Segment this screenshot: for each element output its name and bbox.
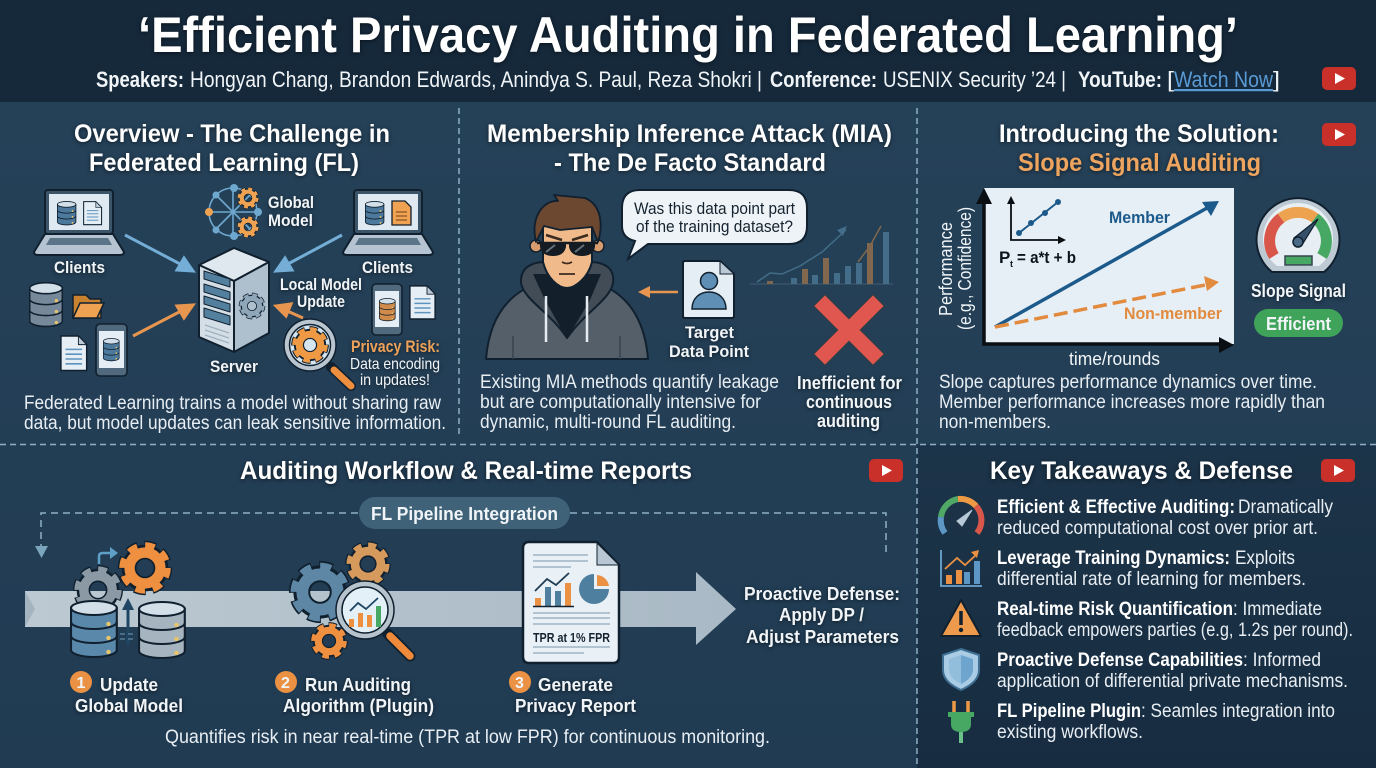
label: privacy risk <box>350 337 440 389</box>
item 1: Efficient & Effective Auditing: <box>997 497 1235 518</box>
icon: left document <box>61 336 87 371</box>
text: MIA body <box>480 372 779 433</box>
panel background: key takeaways <box>917 445 1376 768</box>
label: proactive defense <box>744 583 900 647</box>
label: inefficient: continuous <box>806 391 892 412</box>
heading: solution: Slope Signal Auditing <box>1018 149 1261 177</box>
panel: slope signal solution <box>936 120 1356 433</box>
text: MIA body: but are computationally intensive for <box>480 392 762 413</box>
speech bubble: of the training dataset? <box>636 218 793 236</box>
icon: global model <box>205 184 262 240</box>
axis label: performance: (e.g., Confidence) <box>955 207 975 330</box>
speakers line <box>96 67 1280 92</box>
icon: gauge <box>1257 198 1340 272</box>
label: member: Member <box>1109 208 1170 227</box>
icon: right document <box>410 286 435 319</box>
icon: run auditing <box>295 546 410 656</box>
line: non-member <box>995 276 1219 327</box>
item 4 <box>997 650 1348 692</box>
label: clients left: Clients <box>54 258 105 277</box>
label: slope signal: Slope Signal <box>1251 280 1346 301</box>
icon: magnifier with gear <box>284 319 351 386</box>
item 4: application of differential private mechanisms. <box>997 671 1348 692</box>
formula: = a*t + b <box>1017 248 1076 267</box>
speakers line: Hongyan Chang, Brandon Edwards, Anindya S. Paul, Reza Shokri | <box>190 67 762 92</box>
icon: warning triangle <box>941 600 981 636</box>
label: inefficient: auditing <box>817 410 880 431</box>
panel: overview <box>24 120 446 434</box>
icon: plug <box>948 701 974 743</box>
heading: solution <box>999 120 1279 177</box>
axis label: performance <box>936 207 975 330</box>
label: global model: Global <box>268 194 314 212</box>
icon: left database <box>30 283 62 326</box>
formula: t <box>1010 259 1013 269</box>
icon: left laptop <box>34 190 124 255</box>
text: overview body: data, but model updates can leak sensitive information. <box>24 413 446 434</box>
label: privacy risk: in updates! <box>360 372 430 389</box>
item 4: Proactive Defense Capabilities <box>997 650 1243 671</box>
icon: shield <box>943 649 979 690</box>
item 5: existing workflows. <box>997 722 1143 743</box>
item 3: Real-time Risk Quantification <box>997 599 1233 620</box>
icon: privacy report <box>523 542 619 663</box>
item 3 <box>997 599 1353 641</box>
icon: mini chart <box>941 550 982 586</box>
axis label: time: time/rounds <box>1069 349 1160 369</box>
icon: target data point <box>683 261 734 318</box>
speakers line: YouTube: <box>1078 67 1162 92</box>
text: MIA body: dynamic, multi-round FL auditing. <box>480 412 736 433</box>
text: workflow caption: Quantifies risk in near real-time (TPR at low FPR) for continuous monitoring. <box>165 727 770 748</box>
item 2 <box>997 548 1306 590</box>
item 1: Dramatically <box>1238 497 1333 518</box>
label: privacy risk: Data encoding <box>350 356 440 373</box>
label: target data point <box>669 323 749 361</box>
label: step 1 <box>70 671 183 716</box>
heading: overview: Federated Learning (FL) <box>89 149 359 177</box>
icon: update global model <box>71 546 185 658</box>
label: step 1: Global Model <box>75 695 183 716</box>
label: proactive defense: Apply DP / <box>779 604 864 625</box>
label: step 2 <box>275 671 434 716</box>
heading: workflow: Auditing Workflow & Real-time Reports <box>240 457 692 485</box>
text: overview body: Federated Learning trains a model without sharing raw <box>24 393 441 414</box>
arrow: workflow <box>25 572 736 645</box>
heading: takeaways: Key Takeaways & Defense <box>990 457 1293 485</box>
icon: red cross <box>825 306 873 354</box>
heading: overview: Overview - The Challenge in <box>74 120 390 148</box>
icon: right phone <box>372 284 402 335</box>
label: step 3: Generate <box>538 674 613 695</box>
badge: efficient <box>1254 309 1343 337</box>
text: solution body: Member performance increases more rapidly than <box>939 392 1325 413</box>
title: ‘Efficient Privacy Auditing in Federated Learning’ <box>138 7 1238 63</box>
icon: hooded attacker <box>486 195 648 359</box>
label: proactive defense: Adjust Parameters <box>746 626 899 647</box>
item 2: Exploits <box>1235 548 1295 569</box>
label: step 2: Run Auditing <box>305 674 411 695</box>
item 5: FL Pipeline Plugin <box>997 701 1141 722</box>
icon: youtube takeaways <box>1321 459 1355 482</box>
text: solution body: non-members. <box>939 412 1051 433</box>
item 5 <box>997 701 1335 743</box>
panel: key takeaways <box>941 457 1355 743</box>
icon: folder <box>73 295 104 318</box>
label: non-member: Non-member <box>1124 304 1222 323</box>
speakers line: [ <box>1167 67 1174 92</box>
label: clients right: Clients <box>362 258 413 277</box>
label: global model <box>268 194 314 230</box>
item 2: differential rate of learning for members. <box>997 569 1306 590</box>
label: step 3 <box>509 671 636 716</box>
label: local model update <box>280 276 362 311</box>
item 4: : Informed <box>1243 650 1321 671</box>
icon: youtube solution <box>1322 123 1356 146</box>
speakers line: Conference: <box>770 67 877 92</box>
icon: mini gauge <box>941 499 981 533</box>
speakers line: ] <box>1273 67 1280 92</box>
label: target data point: Target <box>685 323 734 342</box>
speech bubble <box>622 190 807 259</box>
icon: youtube workflow <box>869 459 903 482</box>
formula <box>999 248 1076 269</box>
pill: FL pipeline integration: FL Pipeline Integration <box>371 503 558 524</box>
speech bubble: Was this data point part <box>634 200 795 218</box>
item 3: : Immediate <box>1233 599 1322 620</box>
icon: youtube header <box>1322 67 1356 90</box>
panel: auditing workflow <box>25 457 903 748</box>
dashed feedback loop <box>35 513 886 558</box>
speakers line: Speakers: <box>96 67 184 92</box>
label: inefficient <box>797 372 902 431</box>
label: local model update: Local Model <box>280 276 362 294</box>
label: step 2: 2 <box>281 675 290 692</box>
label: global model: Model <box>268 212 313 230</box>
label: target data point: Data Point <box>669 342 749 361</box>
item 1: reduced computational cost over prior art. <box>997 518 1318 539</box>
chart: slope <box>976 188 1234 353</box>
heading: solution: Introducing the Solution: <box>999 120 1279 148</box>
text: MIA body: Existing MIA methods quantify leakage <box>480 372 779 393</box>
label: proactive defense: Proactive Defense: <box>744 583 900 604</box>
inset: mini slope chart <box>1007 196 1066 244</box>
item 1 <box>997 497 1333 539</box>
heading: MIA: - The De Facto Standard <box>554 149 826 177</box>
icon: privacy report: TPR at 1% FPR <box>533 630 611 645</box>
chart: faded bars behind MIA <box>750 226 893 284</box>
header band <box>0 0 1376 102</box>
item 5: : Seamles integration into <box>1141 701 1335 722</box>
text: solution body: Slope captures performance dynamics over time. <box>939 372 1317 393</box>
item 2: Leverage Training Dynamics: <box>997 548 1230 569</box>
label: step 1: Update <box>100 674 158 695</box>
heading: MIA <box>487 120 892 177</box>
speakers line: USENIX Security ’24 | <box>883 67 1066 92</box>
label: server: Server <box>210 357 258 376</box>
label: step 3: Privacy Report <box>515 695 636 716</box>
line: member <box>995 201 1219 327</box>
label: step 1: 1 <box>76 675 86 692</box>
label: inefficient: Inefficient for <box>797 372 902 393</box>
heading: overview <box>74 120 390 177</box>
icon: server <box>199 248 269 352</box>
label: step 3: 3 <box>515 675 524 692</box>
text: overview body <box>24 393 446 434</box>
panel: membership inference attack <box>480 120 902 433</box>
icon: right laptop <box>343 190 433 255</box>
arrow: data point to attacker <box>638 286 678 298</box>
heading: MIA: Membership Inference Attack (MIA) <box>487 120 892 148</box>
text: solution body <box>939 372 1325 433</box>
label: privacy risk: Privacy Risk: <box>351 337 440 356</box>
badge: efficient: Efficient <box>1266 313 1331 334</box>
speakers line: Watch Now <box>1174 67 1273 92</box>
axis label: performance: Performance <box>936 222 956 316</box>
formula: P <box>999 248 1010 267</box>
pill: FL pipeline integration <box>359 497 570 529</box>
label: local model update: Update <box>297 293 345 311</box>
label: step 2: Algorithm (Plugin) <box>283 695 434 716</box>
arrows into server <box>125 235 342 336</box>
icon: left phone <box>96 324 127 376</box>
